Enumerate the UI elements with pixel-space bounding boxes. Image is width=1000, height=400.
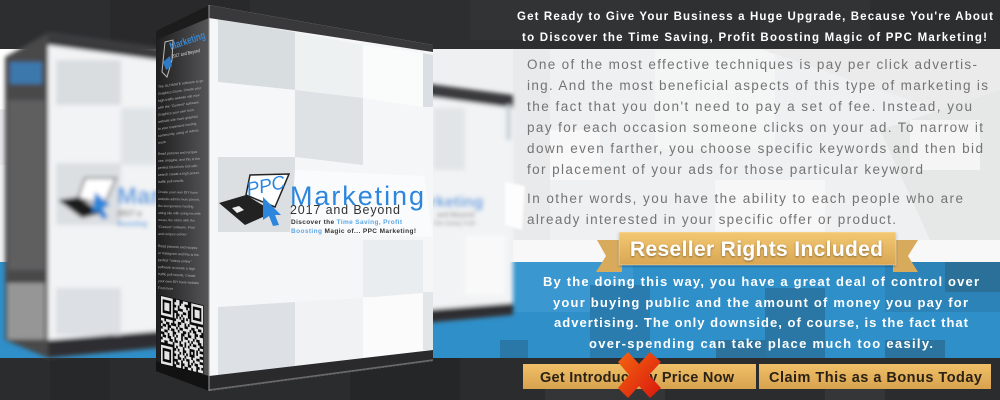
logo tagline line 1: Discover the Time Saving, Profit (291, 219, 403, 226)
body copy on blue band: your buying public and the amount of money you pay for (553, 295, 968, 310)
body copy on blue band: over-spending can take place much too easily. (589, 336, 933, 351)
side description text: to your expensive hosting (158, 122, 197, 131)
side description text: Find more (158, 286, 173, 291)
blurred background product box (5, 33, 513, 358)
ribbon label: Reseller Rights Included (630, 238, 883, 261)
side description text: more. (158, 140, 167, 145)
background: blue checkered band (0, 262, 1000, 358)
blurred background product box: Boosting (117, 221, 147, 228)
front logo sheet (290, 170, 433, 237)
side description text: website admin more pieces, (158, 197, 200, 202)
body copy on light band (527, 57, 988, 227)
paragraph 2: already interested in your specific offer or product. (527, 212, 896, 227)
background: dark top band (0, 0, 1000, 49)
side description text: community, using of videos (158, 128, 199, 138)
side description text: perfect blend into tool with (158, 164, 197, 170)
side logo laptop outline (162, 40, 173, 77)
icon: cursor arrow (263, 197, 281, 226)
logo tagline line 2: Boosting Magic of... PPC Marketing! (291, 228, 416, 235)
side description text (158, 79, 203, 292)
side description text: traffic pull results. Create (158, 272, 196, 278)
blurred background product box: Mar (117, 183, 160, 210)
box top edge (209, 5, 433, 52)
side description text: high-traffic website site now (158, 93, 200, 103)
box bottom edge highlight (209, 360, 433, 390)
blurred background product box: and Beyond (437, 212, 474, 219)
paragraph 2 (527, 191, 963, 227)
blurred logo sheet behind text column (505, 182, 525, 230)
icon: red cross over button (618, 352, 661, 398)
logo subtitle: 2017 and Beyond (290, 203, 400, 217)
side description text: your own DIY have website (158, 279, 199, 285)
button: Claim This as a Bonus Today: Claim This as a Bonus Today (769, 370, 982, 386)
side description text: and recipes online! (158, 232, 187, 236)
ribbon main band (619, 232, 896, 265)
paragraph 1: for placement of your ads for those particular keyword (527, 162, 923, 177)
body copy on blue band (543, 274, 979, 351)
side description text: mean, the niche with the (158, 218, 195, 223)
front checker pattern (218, 19, 433, 375)
side description text: Create your own DIY have (158, 190, 198, 195)
icon: laptop: PPC (245, 172, 288, 201)
paragraph 1: ing. And the most beneficial aspects of this type of marketing is (527, 78, 988, 93)
side description text: "Content" software. Find (158, 225, 195, 230)
side description text: traffic pull results. (158, 179, 184, 184)
paragraph 1: pay for each occasion someone clicks on your ad. To narrow it (527, 120, 983, 135)
icon: laptop (219, 172, 289, 225)
blurred background product box: Time Saving, Profit (433, 221, 476, 227)
side description text: using site with using records (158, 211, 201, 216)
side description text: software to create a high (158, 265, 195, 271)
QR code (160, 295, 204, 374)
side logo wordmark: Marketing (168, 29, 207, 53)
blurred background product box: rketing (430, 194, 483, 211)
main product box (156, 5, 433, 391)
box spine highlight (208, 5, 210, 391)
box front panel (209, 5, 433, 391)
box side bottom edge (156, 361, 209, 391)
paragraph 1: the fact that you don't need to pay a set of fee. Instead, you (527, 99, 972, 114)
paragraph 1: One of the most effective techniques is pay per click advertis- (527, 57, 977, 72)
box bottom edge (209, 350, 433, 391)
button: Get Introductory Price Now (523, 364, 756, 389)
ribbon left tail (596, 240, 622, 272)
headline line 1: Get Ready to Give Your Business a Huge Upgrade, Because You're About (517, 11, 993, 23)
paragraph 1 (527, 57, 988, 177)
background: dark bottom band (0, 358, 1000, 400)
side logo subtitle: 2017 and Beyond (171, 48, 201, 60)
side description text: search create a high power, (158, 171, 200, 177)
button: Claim This as a Bonus Today (759, 364, 991, 389)
side description text: Graphics Drone. Create your (158, 86, 202, 96)
side description text: or Instagram and this is the (158, 251, 199, 257)
box side panel (156, 5, 209, 391)
side description text: Read pictures and recipes (158, 244, 198, 250)
side logo (162, 29, 207, 77)
box side top edge (156, 5, 209, 40)
logo word Marketing: Marketing (290, 181, 424, 211)
side description text: Graphics your own from (158, 108, 194, 117)
side description text: the inexpensive hosting (158, 204, 194, 209)
side description text: perfect "videos online" (158, 258, 192, 264)
headline (517, 11, 993, 44)
paragraph 2: In other words, you have the ability to each people who are (527, 191, 963, 206)
front logo (219, 172, 424, 235)
side description text: use, imagine, and this is the (158, 157, 200, 163)
headline line 2: to Discover the Time Saving, Profit Boosting Magic of PPC Marketing! (522, 32, 987, 44)
button: Get Introductory Price Now: Get Introductory Price Now (540, 370, 735, 386)
side description text: Read pictures and recipes (158, 150, 198, 156)
side description text: website site more graphics (158, 114, 198, 124)
blurred background product box: 2017 a (117, 209, 142, 218)
body copy on blue band: By the doing this way, you have a great deal of control over (543, 274, 979, 289)
ribbon: Reseller Rights Included (596, 232, 918, 272)
side description text: The ULTIMATE software to go (158, 79, 203, 89)
side logo cursor (163, 56, 172, 70)
side description text: with the "Content" software. (158, 100, 200, 110)
body copy on blue band: advertising. The only downside, of course, is the fact that (554, 315, 969, 330)
ribbon right tail (893, 240, 918, 272)
paragraph 1: down even farther, you choose specific keywords and then bid (527, 141, 983, 156)
background: light faceted middle band (0, 49, 1000, 262)
